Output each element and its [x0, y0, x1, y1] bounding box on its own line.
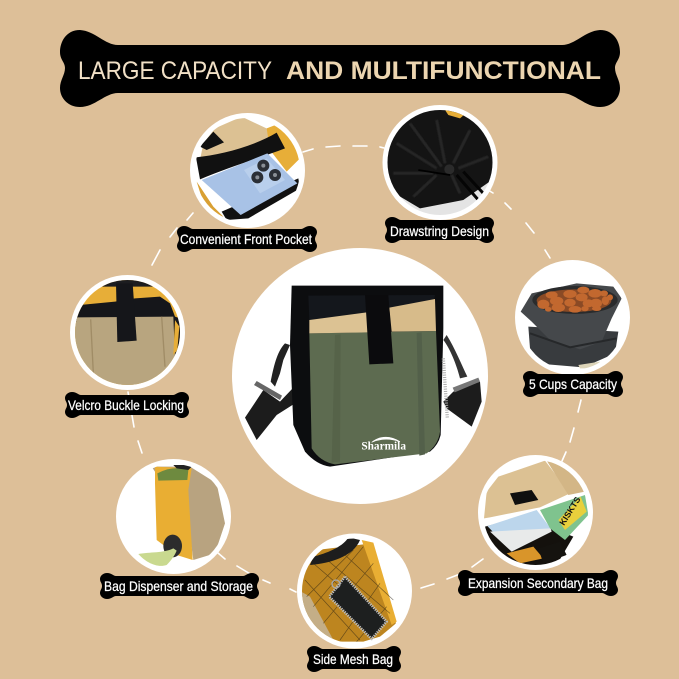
panel: expansion secondary bag: [477, 453, 593, 570]
illustration: training pouch: [245, 286, 482, 467]
icon: phone in front pocket: [196, 118, 299, 220]
label: drawstring design: Drawstring Design: [390, 223, 489, 239]
icon: drawstring closure: [388, 110, 492, 215]
title text: AND MULTIFUNCTIONAL: [286, 57, 601, 85]
label: velcro buckle locking: [65, 392, 189, 418]
panel: velcro buckle locking: [70, 275, 185, 390]
label: convenient front pocket: Convenient Front Pocket: [180, 231, 312, 247]
label: side mesh bag: [307, 646, 401, 672]
label: bag dispenser and storage: [100, 573, 259, 599]
label: bag dispenser and storage: Bag Dispenser and Storage: [104, 578, 253, 594]
panel: drawstring design: [382, 105, 498, 220]
panel: side mesh bag: [297, 534, 412, 648]
label: 5 cups capacity: 5 Cups Capacity: [529, 376, 617, 392]
title text: LARGE CAPACITY: [78, 57, 272, 85]
icon: car key in mesh pocket: [298, 537, 397, 642]
title banner: [60, 30, 620, 107]
bone-shaped banner background: [60, 30, 620, 107]
brand logo: Sharmila: [361, 439, 406, 453]
icon: velcro tab on pocket: [75, 280, 180, 385]
panel: 5 cups capacity: [515, 260, 630, 375]
panel: bag dispenser and storage: [116, 459, 231, 574]
label: 5 cups capacity: [523, 371, 623, 397]
panel: convenient front pocket: [190, 113, 305, 228]
label: convenient front pocket: [177, 226, 317, 252]
label: expansion secondary bag: Expansion Secondary Bag: [468, 575, 608, 591]
label: velcro buckle locking: Velcro Buckle Locking: [68, 397, 184, 413]
icon: bowl of kibble: [521, 283, 622, 368]
label: expansion secondary bag: [458, 570, 618, 596]
label: side mesh bag: Side Mesh Bag: [313, 651, 393, 667]
label: drawstring design: [385, 217, 494, 243]
panel: central bag product photo: [232, 248, 488, 504]
icon: expanded pocket with packets: KISKTS: [557, 495, 583, 527]
icon: waste bag dispenser: [138, 465, 225, 566]
title text: [78, 57, 601, 85]
dashed connector ring: [128, 146, 581, 592]
